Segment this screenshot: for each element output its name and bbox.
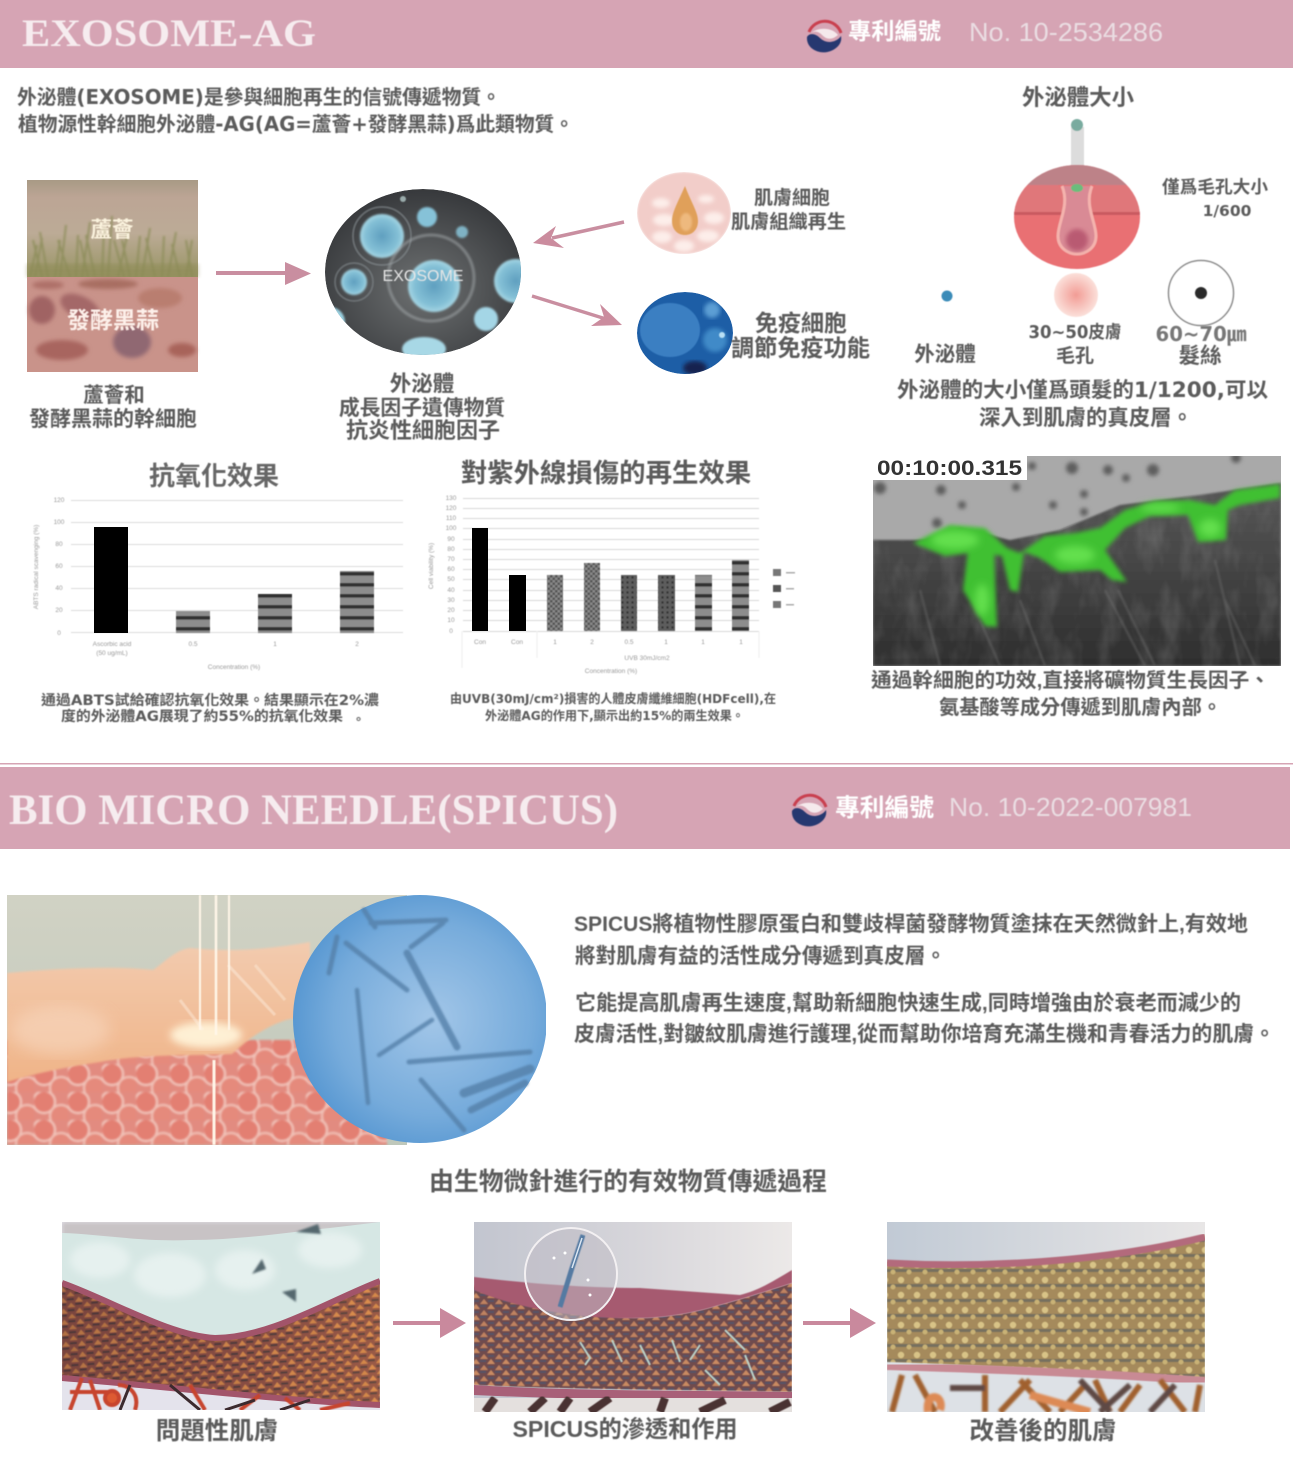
caption: exosome contents: 抗炎性細胞因子 [346, 418, 500, 443]
bar chart: antioxidant: 120 [54, 497, 65, 504]
text: exosome size conclusion: 外泌體的大小僅爲頭髮的1/1200,可以 [897, 378, 1268, 402]
caption: antioxidant result: 度的外泌體AG展現了約55%的抗氧化效果 [61, 707, 343, 725]
bar chart: UV damage regeneration: Cell viability (%) [428, 543, 435, 589]
icon: Korean taegeuk patent mark [792, 795, 826, 826]
bar: 2 percent [340, 571, 374, 633]
magnifier circle with needle [525, 1228, 617, 1320]
bar chart: antioxidant: 1 [273, 641, 277, 648]
label: hair: 髮絲 [1178, 344, 1222, 368]
text block: SPICUS description: SPICUS將植物性膠原蛋白和雙歧桿菌發酵物質塗抹在天然微針上,有效地 [574, 912, 1248, 936]
label: EXOSOME: EXOSOME [383, 268, 463, 285]
text block: SPICUS description: 皮膚活性,對皺紋肌膚進行護理,從而幫助你培育充滿生機和青春活力的肌膚。 [574, 1022, 1275, 1046]
bar chart: antioxidant: 60 [55, 563, 63, 570]
bar chart: antioxidant: ABTS radical scavenging (%) [33, 525, 40, 609]
icon: pore dot [1054, 273, 1098, 317]
caption: exosome contents: 外泌體 [390, 372, 454, 396]
bar chart: UV damage regeneration: 100 [446, 525, 457, 532]
caption: antioxidant result: 。 [352, 712, 365, 727]
heading: exosome size: 外泌體大小 [1022, 85, 1135, 110]
bar chart: UV damage regeneration: 110 [446, 515, 457, 522]
image: improved skin [887, 1222, 1205, 1412]
caption: stem cell delivery [871, 668, 1270, 719]
bar chart: antioxidant: 20 [55, 607, 63, 614]
bar chart: UV damage regeneration: 10 [447, 617, 455, 624]
chart legend [773, 569, 795, 608]
caption: UV result: 由UVB(30mJ/cm²)損害的人體皮膚纖維細胞(HDFcell),在 [450, 691, 776, 706]
timestamp: 00:10:00.315 [877, 457, 1022, 480]
bar chart: antioxidant: Ascorbic acid [93, 641, 132, 648]
intro text block [17, 85, 574, 136]
text: one six-hundredth of a pore [1162, 177, 1268, 220]
arrow: penetration to improved [803, 1308, 876, 1338]
bar chart: UV damage regeneration: 0 [449, 628, 453, 635]
patent number: No. 10-2022-007981 [949, 792, 1192, 822]
caption: UV result [450, 691, 776, 723]
text: skin cell function [731, 187, 846, 233]
label: improved skin: 改善後的肌膚 [970, 1417, 1116, 1445]
caption: stem cell source: 發酵黑蒜的幹細胞 [29, 407, 197, 431]
arrow: exosome to immune cell [532, 296, 622, 326]
caption: exosome contents [339, 372, 505, 443]
bar chart: UV damage regeneration: 40 [447, 587, 455, 594]
icon: hair cross-section [1168, 260, 1234, 326]
text: skin cell function: 肌膚組織再生 [731, 211, 846, 233]
bar chart: UV damage regeneration: Con [511, 639, 523, 646]
illustration: skin pore circle [1010, 165, 1145, 269]
banner: bio micro needle [0, 763, 1293, 849]
intro text block: 植物源性幹細胞外泌體-AG(AG=蘆薈+發酵黑蒜)爲此類物質。 [18, 112, 574, 136]
text: skin cell function: 肌膚細胞 [754, 187, 830, 209]
icon: exosome dot [942, 290, 952, 302]
arrow: source to exosome [216, 262, 311, 285]
heading: EXOSOME-AG: EXOSOME-AG [22, 12, 316, 55]
illustration: needle and dot above pore [1071, 119, 1084, 169]
bar chart: UV damage regeneration: Concentration (%) [585, 668, 637, 675]
label: skin pore: 30~50皮膚 [1028, 322, 1122, 343]
bar chart: UV damage regeneration: 90 [447, 536, 455, 543]
image: spicus penetration [474, 1222, 792, 1412]
bar chart: UV damage regeneration [428, 495, 795, 675]
label: skin pore: 毛孔 [1056, 345, 1094, 367]
bars: controls [472, 528, 526, 631]
bar chart: UV damage regeneration: 60 [447, 566, 455, 573]
patent label: 專利編號 [848, 18, 941, 44]
caption: antioxidant result: 通過ABTS試給確認抗氧化效果。結果顯示在2%濃 [41, 691, 379, 709]
bar chart: UV damage regeneration: 0.5 [624, 639, 634, 646]
bar chart: UV damage regeneration: 1 [553, 639, 557, 646]
heading: UV damage regeneration: 對紫外線損傷的再生效果 [461, 458, 751, 488]
panel: aloe and black garlic image [27, 180, 198, 372]
text block: SPICUS description: 它能提高肌膚再生速度,幫助新細胞快速生成,同時增強由於衰老而減少的 [575, 991, 1241, 1015]
bar chart: UV damage regeneration: 50 [447, 576, 455, 583]
text: exosome size conclusion: 深入到肌膚的真皮層。 [979, 406, 1193, 430]
icon: Korean taegeuk patent mark [807, 21, 841, 52]
arrow: problem to penetration [393, 1308, 466, 1338]
bars: treatments [547, 560, 749, 631]
caption: UV result: 外泌體AG的作用下,顯示出約15%的兩生效果。 [485, 708, 744, 723]
bar chart: UV damage regeneration: 130 [446, 495, 457, 502]
bar: ascorbic acid [94, 527, 128, 633]
bar chart: UV damage regeneration: 30 [447, 597, 455, 604]
illustration: exosome sphere [325, 189, 521, 355]
caption: stem cell source [29, 384, 197, 431]
bar chart: UV damage regeneration: Con [474, 639, 486, 646]
bar chart: antioxidant: 0 [57, 630, 61, 637]
patent label: 專利編號 [835, 794, 935, 822]
bar chart: UV damage regeneration: UVB 30mJ/cm2 [624, 655, 670, 662]
illustration: micro needle in skin [7, 895, 547, 1145]
icon: skin cell circle [637, 172, 731, 254]
label: skin pore [1028, 322, 1122, 367]
patent number: No. 10-2534286 [969, 17, 1163, 47]
label: problem skin: 問題性肌膚 [156, 1417, 278, 1445]
text block: SPICUS description [574, 912, 1275, 1046]
bar chart: antioxidant: 0.5 [188, 641, 198, 648]
bar chart: antioxidant: 2 [355, 641, 359, 648]
caption: stem cell source: 蘆薈和 [83, 384, 145, 407]
bar chart: antioxidant: (50 ug/mL) [96, 650, 128, 657]
bar chart: UV damage regeneration: 80 [447, 546, 455, 553]
caption: antioxidant result [41, 691, 379, 727]
text: one six-hundredth of a pore: 1/600 [1203, 202, 1252, 220]
bar chart: UV damage regeneration: 1 [701, 639, 705, 646]
bar chart: UV damage regeneration: 70 [447, 556, 455, 563]
bar chart: antioxidant: Concentration (%) [208, 664, 260, 671]
bar chart: antioxidant [33, 497, 403, 671]
text: immune cell function: 免疫細胞 [755, 310, 847, 336]
label: aloe: 蘆薈 [90, 218, 134, 242]
icon: immune cell circle [637, 292, 733, 375]
bar chart: antioxidant: 80 [55, 541, 63, 548]
image: problem skin [62, 1222, 380, 1410]
caption: exosome contents: 成長因子遺傳物質 [339, 396, 505, 420]
bar chart: UV damage regeneration: 2 [590, 639, 594, 646]
label: fermented black garlic: 發酵黑蒜 [67, 307, 159, 333]
intro text block: 外泌體(EXOSOME)是參與細胞再生的信號傳遞物質。 [17, 85, 501, 109]
text: exosome size conclusion [897, 378, 1268, 430]
label: exosome: 外泌體 [914, 343, 976, 366]
bar chart: UV damage regeneration: 20 [447, 607, 455, 614]
bar: 1 percent [258, 594, 292, 633]
text: immune cell function [731, 310, 870, 361]
banner: EXOSOME-AG [0, 0, 1293, 68]
bar chart: antioxidant: 40 [55, 585, 63, 592]
photo: microscope fluorescence image [873, 453, 1281, 666]
label: hair [1156, 322, 1246, 368]
arrow: skin cell to exosome [533, 222, 624, 248]
heading: BIO MICRO NEEDLE: BIO MICRO NEEDLE(SPICUS) [9, 787, 618, 834]
heading: antioxidant effect: 抗氧化效果 [149, 461, 279, 491]
bar chart: antioxidant: 100 [54, 519, 65, 526]
bar chart: UV damage regeneration: 1 [664, 639, 668, 646]
text: one six-hundredth of a pore: 僅爲毛孔大小 [1162, 177, 1268, 197]
label: hair: 60~70㎛ [1156, 322, 1246, 346]
bar chart: UV damage regeneration: 120 [446, 505, 457, 512]
text: immune cell function: 調節免疫功能 [731, 335, 870, 361]
bar: 0.5 percent [176, 611, 210, 633]
magnified circle: needle spicules [293, 895, 547, 1143]
bar chart: UV damage regeneration: 1 [739, 639, 743, 646]
caption: stem cell delivery: 氨基酸等成分傳遞到肌膚內部。 [939, 695, 1222, 719]
label: spicus penetration and action: SPICUS的滲透和作用 [512, 1416, 738, 1442]
text block: SPICUS description: 將對肌膚有益的活性成分傳遞到真皮層。 [575, 944, 946, 968]
heading: delivery process: 由生物微針進行的有效物質傳遞過程 [429, 1168, 827, 1196]
caption: stem cell delivery: 通過幹細胞的功效,直接將礦物質生長因子、 [871, 668, 1270, 692]
